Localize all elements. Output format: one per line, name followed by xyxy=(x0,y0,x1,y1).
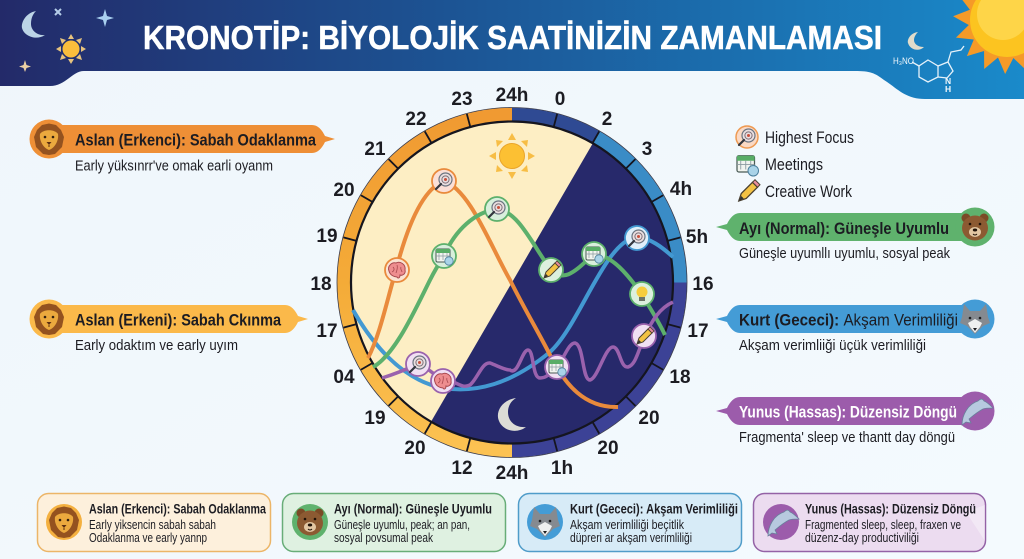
card: bear xyxy=(282,494,506,552)
icon: lion xyxy=(49,506,79,538)
hour labels: 18 xyxy=(669,367,691,388)
hour labels: 24h xyxy=(496,463,528,484)
hour labels: 23 xyxy=(451,89,473,110)
card heading: Yunus (Hassas): Düzensiz Döngü xyxy=(805,502,976,516)
card text: Early yiksencin sabah sabah xyxy=(89,518,216,532)
callout heading: Aslan (Erkenci): Sabah Odaklanma xyxy=(75,130,316,150)
molecule label H3NO: H₃NO xyxy=(893,56,914,67)
node: orange brain xyxy=(385,258,409,282)
hour labels: 0 xyxy=(555,89,565,110)
icon: wolf xyxy=(530,507,560,537)
card: wolf xyxy=(518,494,742,552)
icon: left small sun xyxy=(56,34,86,64)
hour labels: 17 xyxy=(687,321,709,342)
node: green calendar xyxy=(432,244,456,268)
card text line 2: Odaklanma ve early yannp xyxy=(89,531,207,545)
legend: meetings: Meetings xyxy=(765,156,823,174)
callout text: Akşam verimliiği üçük verimliliği xyxy=(739,338,926,354)
curve: blue wolf xyxy=(353,237,673,389)
clock disc night side xyxy=(431,143,673,444)
hour labels: 12 xyxy=(451,458,473,479)
card text line 2: düzenz-day productiviliği xyxy=(805,531,919,545)
icon: left moon xyxy=(22,11,45,38)
hour labels: 16 xyxy=(692,274,714,295)
hour labels xyxy=(310,85,714,484)
ring segments xyxy=(344,114,680,450)
card text: Akşam verimliliği beçitlik xyxy=(570,518,685,532)
icon: dolphin xyxy=(962,399,993,425)
icon: left sparkle blue xyxy=(96,9,114,27)
icon: header moon xyxy=(908,32,924,50)
node: green calendar night xyxy=(582,242,606,266)
icon: dolphin xyxy=(768,510,799,536)
node: orange focus xyxy=(432,169,456,193)
callout heading: Aslan (Erkeni): Sabah Ckınma xyxy=(75,310,281,330)
icon: left small star xyxy=(55,9,61,15)
hour labels: 19 xyxy=(364,408,386,429)
hour labels: 2 xyxy=(602,109,612,130)
curve: purple dolphin xyxy=(382,302,673,386)
icon: bear xyxy=(962,214,988,240)
curve: orange lion xyxy=(368,181,618,407)
hour labels: 19 xyxy=(316,226,338,247)
header banner xyxy=(0,0,1024,99)
callout: lion morning wake xyxy=(30,300,308,354)
hour labels: 21 xyxy=(364,139,386,160)
hour labels: 3 xyxy=(642,139,652,160)
legend: highest focus: Highest Focus xyxy=(765,129,854,147)
hour labels: 20 xyxy=(404,438,426,459)
molecule label N: N xyxy=(945,76,951,86)
title: KRONOTİP: BİYOLOJİK SAATİNİZİN ZAMANLAMASI xyxy=(143,19,882,56)
molecule label H: H xyxy=(945,84,951,94)
hour labels: 1h xyxy=(551,458,573,479)
card heading: Ayı (Normal): Güneşle Uyumlu xyxy=(334,502,492,516)
icon: lion xyxy=(34,124,64,155)
clock disc day side xyxy=(351,122,673,444)
hour labels: 04 xyxy=(333,367,355,388)
icon: left sparkle tan xyxy=(19,60,31,72)
callout heading: Yunus (Hassas): Düzensiz Döngü xyxy=(739,402,957,422)
callout heading: Kurt (Gececi): Akşam Verimliliği xyxy=(739,310,958,330)
callout text: Early odaktım ve early uyım xyxy=(75,338,238,354)
callout: lion morning focus xyxy=(30,120,335,174)
node: purple pencil xyxy=(632,324,656,348)
node: purple calendar xyxy=(545,355,569,379)
callout text: Early yüksınrr've omak earli oyanm xyxy=(75,158,273,174)
card: dolphin xyxy=(754,494,986,552)
hour labels: 20 xyxy=(638,408,660,429)
card text: Fragmented sleep, sleep, fraxen ve xyxy=(805,518,961,532)
hour labels: 17 xyxy=(316,321,338,342)
hour labels: 24h xyxy=(496,85,528,106)
card text: Güneşle uyumlu, peak; an pan, xyxy=(334,518,470,532)
legend xyxy=(736,126,854,201)
icon: bear xyxy=(296,508,324,536)
card: lion xyxy=(38,494,270,552)
hour labels: 5h xyxy=(686,227,708,248)
node: blue focus xyxy=(625,226,649,250)
callout: bear xyxy=(716,208,994,262)
hour labels: 20 xyxy=(597,438,619,459)
icon: moon in clock xyxy=(498,398,526,431)
icon: lion xyxy=(34,304,64,335)
hour labels: 18 xyxy=(310,274,332,295)
callout text: Güneşle uyumllı uyumlu, sosyal peak xyxy=(739,246,951,262)
callout: dolphin xyxy=(716,392,994,446)
node: purple brain xyxy=(431,369,455,393)
node: green pencil xyxy=(539,258,563,282)
card heading: Kurt (Gececi): Akşam Verimliliği xyxy=(570,502,738,516)
icon: wolf xyxy=(960,304,990,334)
callout heading: Ayı (Normal): Güneşle Uyumlu xyxy=(739,219,949,238)
card text line 2: sosyal povsumal peak xyxy=(334,531,434,545)
card heading: Aslan (Erkenci): Sabah Odaklanma xyxy=(89,502,266,516)
circular clock chart xyxy=(337,108,687,458)
node: green focus xyxy=(485,197,509,221)
callout text: Fragmenta' sleep ve thantt day döngü xyxy=(739,430,955,446)
card text line 2: düpreri ar akşam verimliliği xyxy=(570,531,692,545)
curve: green bear xyxy=(373,209,665,367)
node: purple focus xyxy=(406,352,430,376)
node: green bulb xyxy=(630,282,654,306)
icon: right big sun xyxy=(953,0,1024,74)
hour labels: 22 xyxy=(405,109,427,130)
callout: wolf xyxy=(716,300,994,354)
hour labels: 20 xyxy=(333,180,355,201)
hour labels: 4h xyxy=(670,179,692,200)
legend: creative work: Creative Work xyxy=(765,183,853,201)
icon: sun in clock xyxy=(489,133,535,179)
icon: melatonin molecule xyxy=(912,46,964,82)
